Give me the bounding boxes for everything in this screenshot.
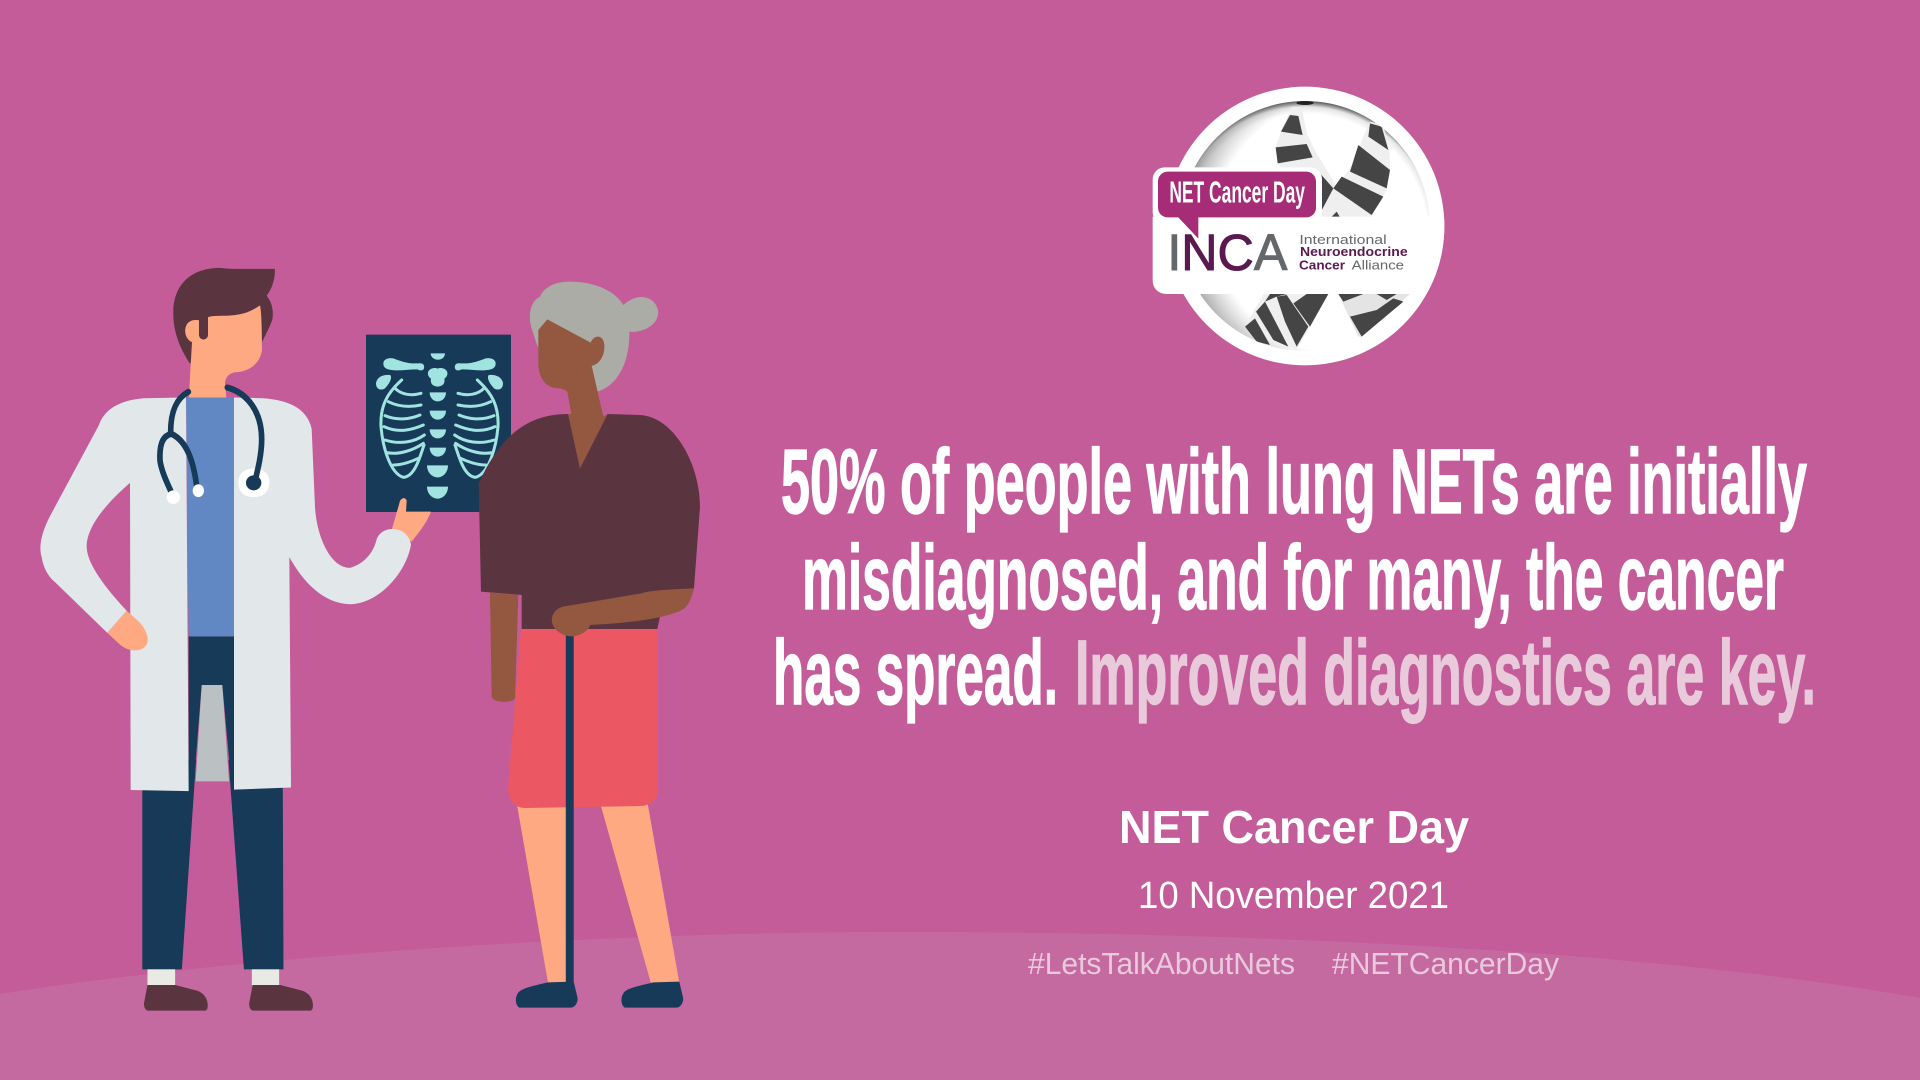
coat back — [196, 685, 229, 781]
doctor's hand holding film — [392, 498, 431, 542]
headline — [773, 431, 1816, 724]
speech bubble outline — [1153, 167, 1322, 224]
speech bubble — [1158, 172, 1316, 239]
INCA wordmark: INCA — [1167, 224, 1287, 281]
event date: 10 November 2021 — [1138, 875, 1449, 917]
hashtag two: #NETCancerDay — [1332, 946, 1559, 981]
zebra ribbon — [1245, 107, 1410, 350]
sideburn — [199, 316, 208, 339]
stethoscope — [160, 387, 269, 504]
trousers top — [189, 636, 234, 791]
left ribs — [376, 358, 424, 477]
doctor legs and shoes — [142, 760, 313, 1011]
left hand — [107, 611, 148, 650]
coat left side — [40, 397, 189, 791]
alliance name: Neuroendocrine — [1300, 244, 1408, 259]
outer white circle — [1166, 87, 1444, 365]
cane — [566, 630, 574, 982]
face and neck — [185, 305, 262, 400]
alliance name — [1299, 232, 1408, 272]
skirt — [508, 629, 658, 808]
white label band — [1153, 217, 1444, 294]
patient upper body — [479, 282, 700, 702]
shirt — [479, 414, 700, 629]
patient legs and shoes — [516, 803, 683, 1008]
event name: NET Cancer Day — [1119, 801, 1469, 853]
film sheet — [366, 335, 511, 512]
coat right side — [234, 397, 411, 790]
logo: INCA NET Cancer Day badge — [1153, 87, 1444, 365]
spine — [427, 353, 448, 499]
inner shaded dish — [1180, 101, 1430, 351]
right ribs — [455, 358, 503, 477]
illustration: doctor — [40, 268, 411, 1011]
illustration: x-ray film — [366, 335, 511, 542]
bubble text: NET Cancer Day — [1169, 176, 1305, 210]
alliance name: Alliance — [1352, 257, 1404, 272]
alliance name: International — [1299, 232, 1387, 247]
doctor upper body — [40, 268, 411, 791]
hashtag one: #LetsTalkAboutNets — [1028, 946, 1295, 981]
face and neck — [538, 319, 608, 468]
hair — [530, 282, 658, 392]
left arm — [490, 593, 518, 702]
shirt — [186, 397, 234, 636]
hair — [173, 268, 275, 364]
alliance name: Cancer — [1299, 257, 1345, 272]
ground hill — [0, 932, 1920, 1080]
headline: has spread. — [773, 622, 1058, 724]
forearm and hand — [552, 588, 694, 636]
illustration: patient — [479, 282, 700, 1008]
